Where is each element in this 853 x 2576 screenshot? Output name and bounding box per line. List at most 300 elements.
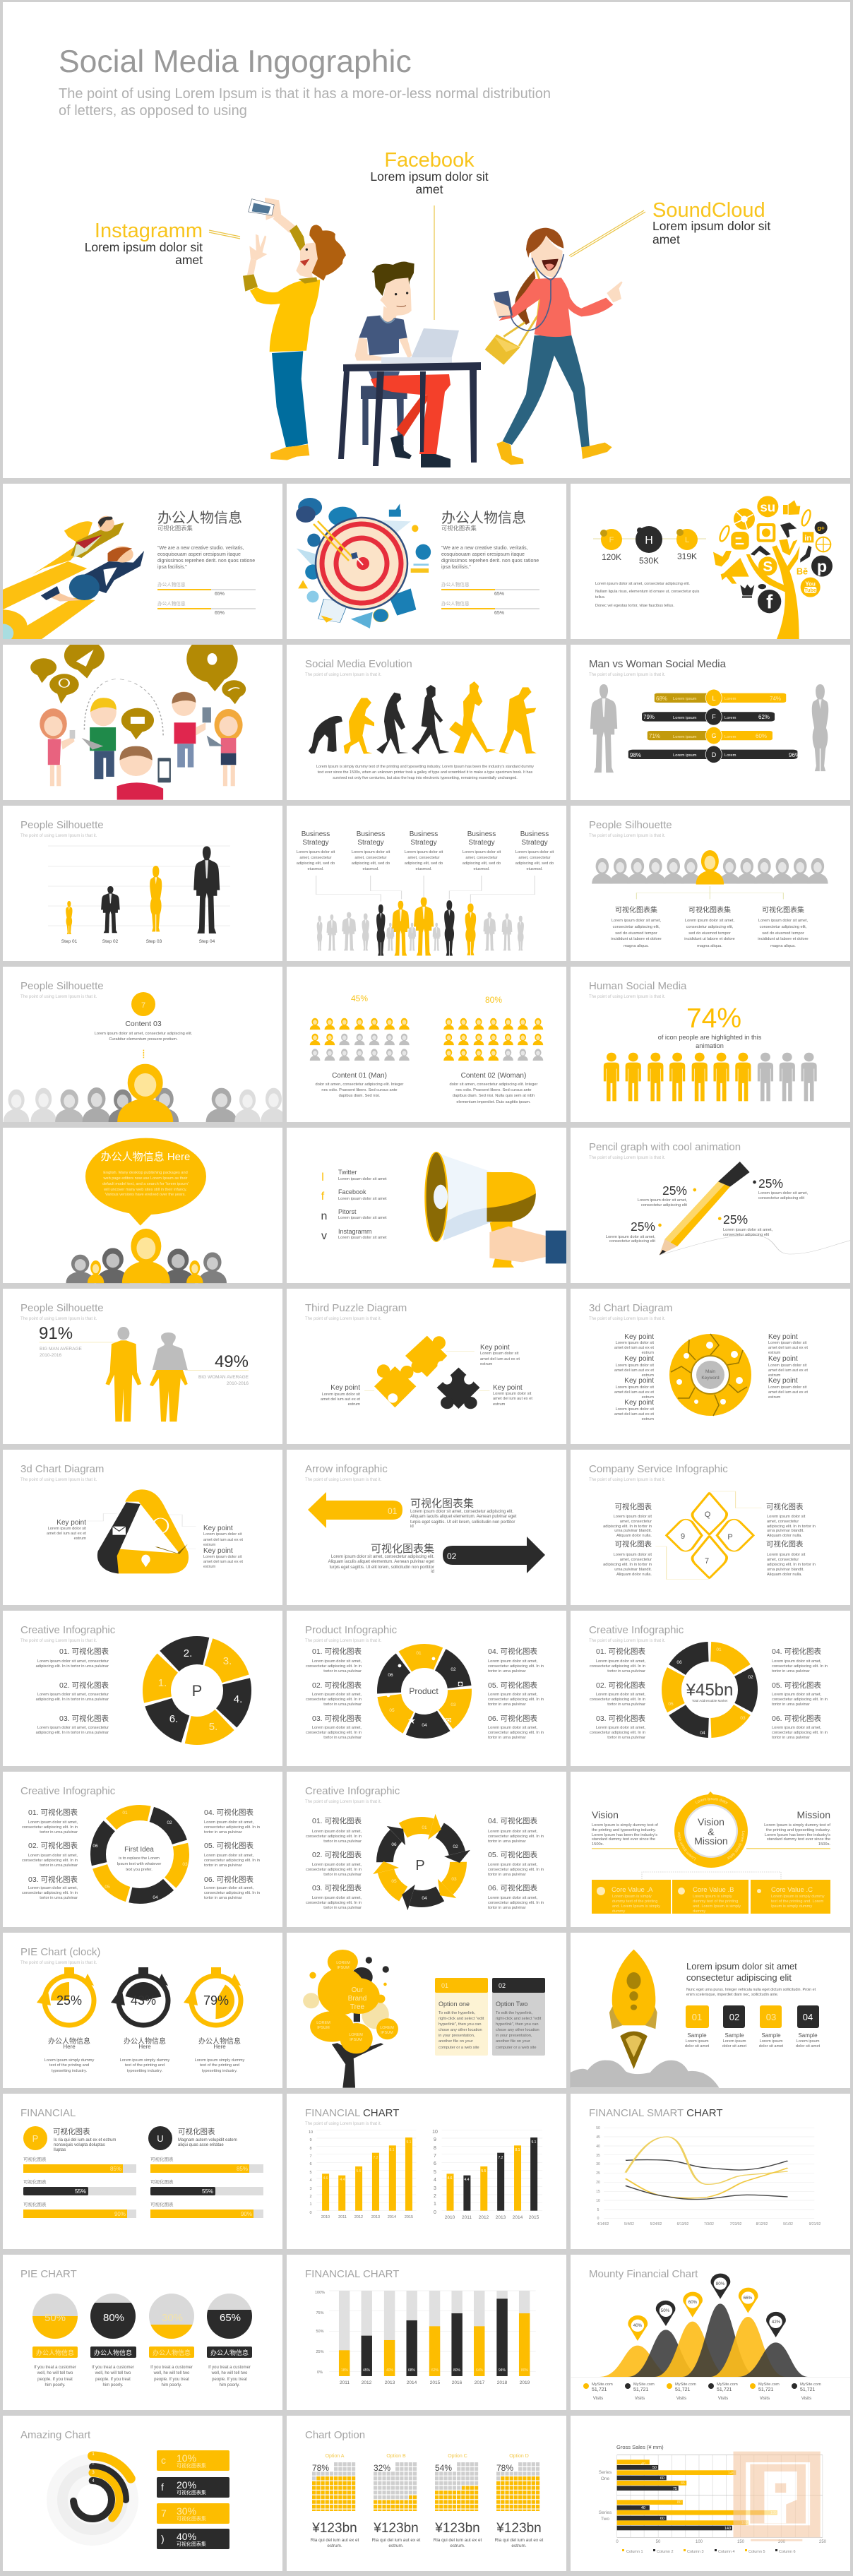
stat: 49%: [198, 1352, 249, 1386]
list: right: Lorem ipsum dolor sit amet,: [488, 1863, 538, 1867]
chart: arrow ring: P: [415, 1858, 425, 1873]
list: right: 04. 可视化图表: [488, 1816, 538, 1825]
panel: Pencil graph: [571, 1128, 850, 1283]
chart: right bars: 8.1: [515, 2148, 520, 2152]
stat: 25% upper left: Lorem ipsum dolor sit amet,: [638, 1198, 687, 1203]
chart: ring of six: 3.: [223, 1655, 232, 1667]
arrow: right dark: [443, 1537, 545, 1573]
column texts: [297, 830, 554, 871]
list: right: consectetur adipiscing elit. In in: [772, 1731, 828, 1735]
chart: stacked bars: 25%: [316, 2350, 324, 2354]
card: option one: 01: [441, 1982, 448, 1989]
illustration: tree: IPSUM: [381, 2031, 393, 2035]
card: option two: 02: [499, 1982, 506, 1989]
legend: 51,721: [592, 2387, 607, 2392]
chart: right bars: 2014: [513, 2215, 523, 2220]
list: Twitter: [338, 1169, 357, 1176]
list: left: tortor in urna pulvinar: [323, 1669, 362, 1674]
columns: sed do eiusmod tempor: [762, 931, 804, 936]
key point: right bottom: estrum: [203, 1565, 216, 1569]
stat boxes: 可视化图表集: [177, 2489, 206, 2496]
list: right: 06. 可视化图表: [488, 1714, 538, 1723]
column texts: adipiscing elit, sed do: [463, 861, 501, 866]
block: P: lluptas: [54, 2148, 66, 2152]
chart: right bars: 7.2: [499, 2156, 503, 2160]
captions: him poorly.: [162, 2383, 182, 2387]
figure: selfie man: [243, 198, 346, 460]
progress bars: right: 可视化图表: [150, 2156, 174, 2162]
chart: right bars: 9: [434, 2137, 436, 2142]
columns: sed do eiusmod tempor: [688, 931, 731, 936]
chart: horizontal bars: 140: [724, 2527, 731, 2531]
captions: him poorly.: [103, 2383, 124, 2387]
chart: 45bn ring: [657, 1638, 762, 1742]
panel: target: [287, 484, 566, 639]
chart: concentric arcs: 3: [92, 2471, 95, 2475]
text block: 01: [410, 1498, 517, 1529]
list: right: tortor in urna pulvinar: [488, 1736, 526, 1740]
comparison bars: 96%: [789, 752, 800, 758]
legend: 51,721: [633, 2387, 649, 2392]
ring: Vision & Mission: Vision: [698, 1816, 724, 1827]
comparison bars: F: [712, 713, 716, 720]
legend: 51,721: [717, 2387, 732, 2392]
sample blocks: Sample: [761, 2032, 781, 2039]
list: right: tortor in urna pulvinar: [488, 1873, 526, 1877]
chart: smart lines: 9/21/02: [809, 2222, 821, 2226]
list: left: consectetur adipiscing elit. In in: [590, 1664, 645, 1669]
text block: Curabitur elementum posuere pretium.: [109, 1037, 178, 1042]
comparison bars: 60%: [756, 733, 767, 739]
chart: arrow ring: 06: [391, 1842, 397, 1847]
panel: Creative Infographic 45bn: [571, 1611, 850, 1766]
charts: fill circles: 50%: [44, 2312, 66, 2324]
text: Mission: [746, 1809, 830, 1849]
column texts: Lorem ipsum dolor sit: [463, 850, 501, 854]
paragraph: Lorem Ipsum is simply dummy text of the printing and typesetting industry. Lorem Ipsum has been the industry's standard dummy: [316, 765, 534, 769]
chart: horizontal bars: 75: [673, 2487, 677, 2491]
comparison bars: 79%: [643, 714, 655, 720]
icon: social media tree: You: [805, 580, 816, 587]
list: Lorem ipsum dolor sit amet: [338, 1236, 387, 1240]
text: left top: [603, 1502, 652, 1538]
key points: left column: Key point: [624, 1399, 654, 1407]
block: U: 可视化图表: [178, 2127, 215, 2136]
quote: dignissimos reprehen derit. non quos ratione: [441, 559, 539, 564]
captions: typesetting industry.: [127, 2069, 162, 2073]
illustration: tree: Tree: [350, 2003, 365, 2011]
chart: left bars: 5.5: [357, 2169, 362, 2174]
key points: right column: estrum: [768, 1373, 781, 1378]
diagram: four diamonds: Q: [705, 1510, 711, 1519]
sample blocks: Sample: [798, 2032, 818, 2039]
chart: product ring: 05: [389, 1708, 395, 1713]
columns: incididunt ut labore et dolore: [684, 937, 735, 941]
list: left: Lorem ipsum dolor sit amet,: [596, 1726, 645, 1730]
chart: stacked bars: 0%: [317, 2371, 323, 2375]
subheading: 可视化图表集: [157, 525, 193, 532]
key points: right column: Lorem ipsum dolor sit: [768, 1341, 807, 1345]
values: ¥123bn: [373, 2521, 419, 2536]
heading: Creative Infographic: [20, 1785, 116, 1797]
captions: text of the printing and: [125, 2063, 165, 2068]
list: right: Lorem ipsum dolor sit amet,: [488, 1726, 538, 1730]
charts: fill circles: [32, 2294, 252, 2339]
list: left: [590, 1647, 645, 1740]
chart: left bars: 8: [309, 2147, 312, 2151]
list: Lorem ipsum dolor sit amet, consectetur: [37, 1693, 109, 1697]
chart: product ring: ✉: [445, 1717, 452, 1725]
heading: 3d Chart Diagram: [589, 1302, 672, 1314]
list: left: Lorem ipsum dolor sit amet,: [28, 1820, 78, 1825]
bullets: tellus.: [595, 595, 606, 600]
chart: product ring: [376, 1642, 473, 1740]
panel: brand tree: [287, 1933, 566, 2088]
chart: swirl ring: 02: [167, 1820, 172, 1825]
card: option two: [492, 1978, 545, 2056]
progress bars: 65%: [215, 611, 225, 616]
captions: estrum.: [450, 2544, 465, 2548]
illustration: people with speech bubbles: [30, 636, 246, 800]
text: left bottom: [603, 1539, 652, 1577]
illustration: flying people: [0, 516, 144, 643]
list: right: consectetur adipiscing elit. In in: [488, 1698, 544, 1702]
card: option one: To edit the hyperlink,: [439, 2011, 476, 2015]
progress bars: right: 55%: [202, 2188, 213, 2195]
chart: stacked bars: 2014: [407, 2380, 417, 2385]
captions: If you treat a customer: [208, 2366, 251, 2370]
stat boxes: f: [161, 2481, 164, 2493]
list: right: tortor in urna pulvinar: [488, 1839, 526, 1844]
list: right: Lorem ipsum dolor sit amet,: [488, 1659, 538, 1664]
stat boxes: 30%: [177, 2505, 196, 2517]
stat: 25% lower left: Lorem ipsum dolor sit amet,: [606, 1235, 655, 1239]
chart: right bars: 4.6: [448, 2176, 453, 2181]
key point: right bottom: Key point: [203, 1547, 233, 1555]
chart: stacked bars: 62%: [431, 2368, 439, 2373]
chart: right bars: 0: [434, 2210, 436, 2215]
comparison bars: [628, 689, 800, 763]
stat: 25% upper left: consectetur adipiscing elit: [641, 1203, 687, 1208]
list: left: 03. 可视化图表: [312, 1714, 362, 1723]
ring: Vision & Mission: Lorem ipsum dolor: [727, 1831, 745, 1860]
core value boxes: dummy text of the printing: [693, 1900, 738, 1904]
stat boxes: 40%: [177, 2531, 196, 2542]
chart: 45bn ring: 02: [748, 1675, 753, 1680]
panel: rocket: [570, 1933, 850, 2088]
text: content 01: Content 01 (Man): [332, 1072, 387, 1080]
stat: 74%: 74%: [686, 1003, 741, 1034]
panel: PIE CHART: [3, 2255, 282, 2410]
chart: product ring: ●: [386, 1691, 390, 1700]
heading: 3d Chart Diagram: [20, 1463, 104, 1475]
list: right: [488, 1816, 544, 1910]
counters: 530K: [639, 556, 659, 566]
comparison bars: L: [712, 695, 716, 702]
subheading: The point of using Lorem Ipsum is that it.: [589, 1156, 666, 1160]
chart: horizontal bars: 145: [728, 2471, 734, 2476]
speech bubble: web page editors now use Lorem Ipsum as their: [102, 1176, 188, 1181]
panel: Vision and Mission: [571, 1772, 850, 1927]
stat: 45%: 45%: [351, 994, 368, 1003]
legend: Column 1: [626, 2550, 643, 2554]
chart: smart lines: 10: [596, 2199, 600, 2203]
text: content 02: Content 02 (Woman): [461, 1072, 526, 1080]
list: right: tortor in urna pulvinar: [488, 1906, 526, 1910]
list: left: 03. 可视化图表: [28, 1875, 78, 1884]
chart: stacked bars: 2018: [497, 2380, 508, 2385]
text block: 01: 可视化图表集: [410, 1498, 474, 1510]
diagram: four diamonds: [655, 1491, 762, 1580]
text: content 02: dapibus diam. Sed nisi. Nulla quis sem at nibh: [453, 1094, 535, 1098]
sample blocks: dolor sit amet: [685, 2044, 709, 2049]
text: right bottom: adipiscing elit. In in tortor in: [767, 1563, 816, 1567]
list: Lorem ipsum dolor sit amet: [338, 1216, 387, 1220]
text: right top: amet, consectetur: [767, 1520, 799, 1524]
list: left: 02. 可视化图表: [312, 1850, 362, 1859]
progress bars: left: 55%: [75, 2188, 86, 2195]
list: adipiscing elit. In in tortor in urna pulvinar: [36, 1698, 109, 1702]
column texts: eiusmod.: [415, 867, 432, 871]
comparison bars: Lorem: [724, 735, 736, 739]
text: right top: Lorem ipsum dolor sit: [767, 1515, 806, 1519]
text: right bottom: Lorem ipsum dolor sit: [767, 1553, 806, 1557]
panel: Social Media Evolution: [287, 645, 566, 800]
chart: dot matrix columns: Option C: [448, 2454, 467, 2459]
subheading: The point of using Lorem Ipsum is that it.: [589, 1639, 666, 1643]
progress bars: right: 90%: [241, 2211, 252, 2217]
key point: top right: estrum: [480, 1362, 493, 1366]
chart: horizontal bars: 100: [696, 2540, 703, 2544]
list: right: 05. 可视化图表: [772, 1681, 822, 1690]
icon: social media tree: Bē: [797, 566, 808, 576]
text: content 01: nec odio. Praesent libero. Sed cursus ante: [321, 1088, 398, 1092]
text: right top: [766, 1502, 816, 1538]
figure: right boy: [172, 691, 211, 768]
captions: 办公人物信息: [124, 2037, 166, 2046]
panel: megaphone: [287, 1128, 566, 1283]
legend: Column 2: [657, 2550, 674, 2554]
captions: well, he will tell two: [95, 2371, 131, 2375]
chart: stacked bars: 2016: [452, 2380, 463, 2385]
chart: left bars: 2013: [371, 2215, 380, 2219]
card: option two: another file on your: [496, 2039, 530, 2044]
chart: 45bn ring: 01: [716, 1647, 722, 1652]
comparison bars: Lorem ipsum: [673, 697, 697, 701]
chart: stacked bars: 45%: [363, 2368, 371, 2373]
panel: FINANCIAL SMART CHART: [571, 2094, 850, 2249]
text: content 02: dolor sit amen, consectetur adipiscing elit. Integer: [450, 1083, 538, 1087]
key point: right top: estrum: [203, 1543, 216, 1547]
key point: left: amet del ium aut ex et: [47, 1532, 86, 1536]
chart: left bars: 7.2: [374, 2156, 378, 2160]
list: 03. 可视化图表: [59, 1714, 109, 1723]
text: left bottom: Lorem ipsum dolor sit: [614, 1553, 652, 1557]
chart: swirl ring: 06: [93, 1844, 98, 1849]
column texts: Strategy: [468, 839, 495, 847]
panel: social media tree: [571, 484, 850, 639]
illustration: tree: IPSUM: [337, 1966, 350, 1970]
list: right: Lorem ipsum dolor sit amet,: [204, 1820, 254, 1825]
core value boxes: Core Value .C: [771, 1886, 813, 1894]
captions: Ria qui del ium aut ex et: [311, 2538, 359, 2543]
ring: Vision & Mission: &: [708, 1826, 715, 1837]
quote: dignissimos reprehen derit. non quos ratione: [157, 559, 255, 564]
progress bars: right: 可视化图表: [150, 2201, 174, 2207]
callout: SoundCloud: Lorem ipsum dolor sit: [652, 219, 770, 233]
chart: left bars: 2011: [338, 2215, 347, 2219]
list: right: tortor in urna pulvinar: [488, 1669, 526, 1674]
card: option two: in your presentation,: [496, 2034, 532, 2038]
stat: 80%: 80%: [485, 995, 502, 1005]
list: right: Lorem ipsum dolor sit amet,: [204, 1886, 254, 1890]
stat boxes: 可视化图表集: [177, 2515, 206, 2522]
illustration: tree: [303, 1950, 398, 2088]
captions: typesetting industry.: [202, 2069, 237, 2073]
chart: smart lines: 7/23/02: [730, 2222, 742, 2226]
chart: arrow ring: 04: [422, 1896, 427, 1901]
key point: bottom right: estrum: [493, 1402, 506, 1407]
key points: left column: Lorem ipsum dolor sit: [616, 1385, 654, 1390]
icon: man silhouette: [590, 684, 617, 773]
chart: product ring: 04: [422, 1723, 427, 1728]
list: Lorem ipsum dolor sit amet, consectetur: [37, 1726, 109, 1730]
list: left: 02. 可视化图表: [28, 1841, 78, 1850]
chart: right bars: [432, 2130, 542, 2220]
core value boxes: dummy text of the printing: [612, 1900, 657, 1904]
subheading: The point of using Lorem Ipsum is that it.: [305, 673, 382, 677]
panel: Arrow infographic: [287, 1450, 566, 1605]
legend: 51,721: [758, 2387, 774, 2392]
chart: left bars: 2010: [321, 2215, 330, 2219]
captions: [311, 2538, 544, 2548]
list: right: 05. 可视化图表: [488, 1681, 538, 1690]
column texts: Lorem ipsum dolor sit: [405, 850, 443, 854]
key points: right column: amet del ium aut ex et: [768, 1368, 808, 1373]
chart: product ring: ◘: [458, 1680, 463, 1688]
core value boxes: Lorem Ipsum is simply: [693, 1895, 732, 1899]
stat boxes: 7: [161, 2508, 167, 2519]
text: Vision: Vision: [592, 1809, 619, 1820]
chart: dot matrix columns: 78%: [496, 2463, 513, 2473]
heading: People Silhouette: [20, 1302, 104, 1314]
chart: dot matrix columns: Option B: [386, 2454, 406, 2459]
columns: Lorem ipsum dolor sit amet,: [685, 919, 735, 923]
core value boxes: text of the printing and. Lorem: [771, 1900, 824, 1904]
callout: SoundCloud: amet: [652, 232, 680, 246]
chart: right bars: 4.4: [465, 2178, 470, 2182]
legend: Visits: [676, 2397, 686, 2401]
captions: Here: [63, 2044, 76, 2050]
columns: 可视化图表集: [615, 905, 657, 914]
stat: 25% lower left: consectetur adipiscing elit: [609, 1239, 655, 1244]
chart: horizontal bars: 150: [737, 2540, 745, 2544]
chart: horizontal bars: 80: [677, 2500, 681, 2505]
illustration: three people with devices: [243, 198, 623, 467]
key points: right column: Key point: [768, 1377, 798, 1385]
chart: swirl ring: is to replace the Lorem: [119, 1856, 160, 1861]
core value boxes: Core Value .B: [693, 1886, 734, 1894]
chart: horizontal bars: [599, 2455, 827, 2544]
speech bubble: [85, 1138, 206, 1226]
legend: MySite.com: [717, 2383, 738, 2387]
chart: smart lines: 30: [596, 2162, 600, 2166]
columns: consectetur adipiscing elit,: [686, 925, 734, 929]
charts: fill circles: 30%: [162, 2312, 183, 2324]
chart: right bars: 9.1: [532, 2140, 537, 2145]
key point: bottom right: Key point: [493, 1384, 523, 1392]
column texts: Lorem ipsum dolor sit: [515, 850, 554, 854]
chart: horizontal bars: 195: [770, 2511, 777, 2515]
bullets: Nullam ligula risus, elementum id ornare ut, consectetur quis: [595, 590, 700, 594]
diagram: four diamonds: 7: [705, 1557, 709, 1566]
list: left: consectetur adipiscing elit. In in: [306, 1835, 362, 1839]
column texts: adipiscing elit, sed do: [297, 861, 335, 866]
key point: right bottom: Lorem ipsum dolor sit: [203, 1555, 242, 1559]
legend: MySite.com: [592, 2383, 613, 2387]
chart: bell mountains with pins: 50%: [661, 2308, 670, 2313]
illustration: bust crowd: [4, 1050, 287, 1122]
chart: smart lines: 6/13/02: [677, 2222, 689, 2226]
list: right: [772, 1647, 828, 1740]
chart: bell mountains with pins: 40%: [633, 2323, 643, 2328]
clock: 79%: [184, 1967, 241, 2025]
chart: stacked bars: 18%: [341, 2368, 349, 2373]
chart: arrow ring: 03: [451, 1877, 457, 1882]
chart: right bars: 2012: [479, 2215, 489, 2220]
captions: text of the printing and: [200, 2063, 239, 2068]
illustration: crowd with connectors: [316, 876, 535, 955]
chart: stacked bars: 100%: [315, 2291, 325, 2295]
text: right bottom: urna pulvinar blandit.: [767, 1568, 804, 1572]
sample blocks: Lorem ipsum: [723, 2039, 746, 2044]
illustration: tree: IPSUM: [350, 2038, 362, 2042]
key points: left column: [614, 1333, 654, 1421]
chart: right bars: 2015: [529, 2215, 539, 2220]
illustration: target with dart: [296, 498, 431, 628]
icons: 10 people: [604, 1053, 817, 1101]
icon: social media tree: p: [817, 557, 827, 576]
comparison bars: Lorem: [724, 697, 736, 701]
subheading: The point of using Lorem Ipsum is that it.: [20, 1961, 97, 1965]
stat: 25% lower right: 25%: [723, 1212, 748, 1227]
panel: FINANCIAL: [3, 2094, 282, 2249]
chart: concentric arcs: 2: [92, 2462, 95, 2466]
chart: swirl ring: text you prefer.: [126, 1868, 153, 1872]
text: left bottom: adipiscing elit. In in tortor in: [603, 1563, 652, 1567]
list: 02. 可视化图表: [59, 1681, 109, 1690]
progress bars: 办公人物信息: [441, 600, 470, 607]
stat boxes: 可视化图表集: [177, 2462, 206, 2469]
chart: swirl ring: 05: [105, 1885, 110, 1890]
key point: top right: [480, 1344, 520, 1366]
list: right: consectetur adipiscing elit. In in: [488, 1664, 544, 1669]
captions: If you treat a customer: [150, 2366, 193, 2370]
chart: right bars: 7: [434, 2154, 436, 2159]
text: Vision: the printing and typesetting industry.: [592, 1828, 656, 1832]
heading: FINANCIAL CHART: [305, 2107, 399, 2119]
text block: 02: 可视化图表集: [371, 1543, 434, 1555]
illustration: pencil: [658, 1162, 850, 1255]
chart: stacked bars: 2013: [385, 2380, 395, 2385]
text: right bottom: Aliquam dolor nulla.: [767, 1573, 802, 1577]
stat: 25% lower left: 25%: [631, 1220, 655, 1234]
chart: product ring: 01: [416, 1651, 422, 1656]
progress bars: 办公人物信息: [157, 600, 186, 607]
heading: FINANCIAL SMART CHART: [589, 2107, 723, 2119]
illustration: tree: LOREM: [336, 1961, 350, 1965]
text block: 01: id: [410, 1525, 414, 1529]
